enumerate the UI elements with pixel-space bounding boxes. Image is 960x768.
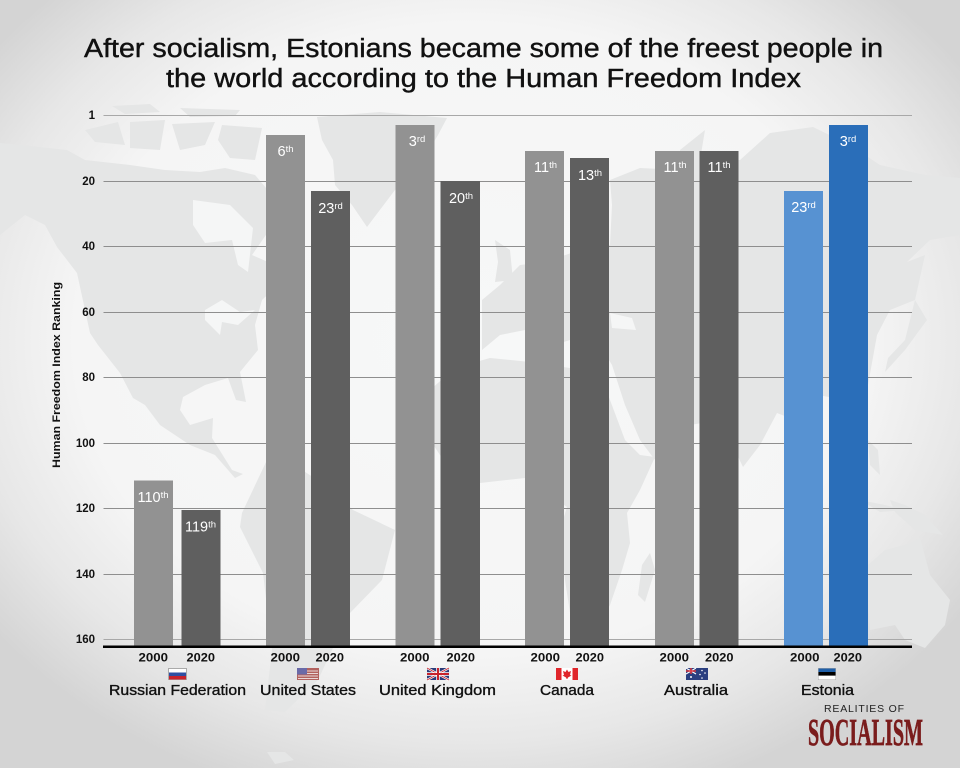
bars: United States	[266, 135, 350, 646]
bars: United Kingdom: 20	[449, 191, 465, 207]
year labels: 2020	[576, 652, 604, 664]
y axis labels: 100	[76, 438, 95, 450]
bars: Russian Federation: th	[208, 520, 216, 530]
australia	[868, 538, 950, 648]
flag: United States	[297, 668, 319, 680]
country labels: Canada	[540, 683, 595, 699]
y axis labels: 80	[82, 372, 95, 384]
x axis baseline	[103, 646, 912, 648]
year labels	[138, 652, 862, 664]
country labels	[109, 683, 855, 699]
bars: Estonia: rd	[807, 200, 816, 211]
bars: Canada	[525, 151, 609, 646]
logo: REALITIES OF	[824, 703, 904, 715]
flag: Estonia	[818, 668, 836, 680]
bars: Estonia: 3	[840, 134, 848, 150]
year labels: 2000	[530, 652, 560, 664]
bars	[134, 125, 868, 646]
y axis labels: 40	[82, 241, 95, 253]
africa	[430, 358, 655, 645]
year labels: 2000	[790, 652, 820, 664]
year labels: 2020	[316, 652, 344, 664]
y axis labels: 60	[82, 307, 95, 319]
bars: Australia: th	[723, 160, 730, 171]
country labels: Australia	[664, 683, 729, 699]
bars: Estonia: 23	[791, 200, 807, 216]
logo	[808, 703, 923, 754]
indonesia	[860, 440, 905, 512]
bars: Russian Federation: 110	[137, 490, 161, 506]
north america	[0, 143, 290, 478]
bars: Russian Federation	[134, 480, 220, 646]
bars: United Kingdom: 3	[409, 134, 417, 150]
bars: Australia	[655, 151, 738, 646]
title	[84, 35, 883, 93]
bars: Estonia	[784, 125, 868, 646]
bars: Russian Federation: 119	[185, 520, 208, 536]
y axis title: Human Freedom Index Ranking	[51, 282, 63, 468]
y axis labels: 1	[89, 110, 96, 122]
new guinea	[890, 500, 943, 535]
title: the world according to the Human Freedom Index	[166, 65, 801, 93]
year labels: 2020	[186, 652, 215, 664]
bars: United States: 6	[277, 144, 286, 160]
country labels: Estonia	[801, 683, 855, 699]
flag: Australia	[686, 668, 708, 680]
arctic islands	[85, 104, 262, 160]
bars: United States: th	[286, 144, 294, 155]
country labels: United States	[260, 683, 356, 699]
y axis labels	[76, 110, 96, 646]
south america	[240, 460, 395, 712]
year labels: 2020	[705, 652, 734, 664]
year labels: 2000	[270, 652, 300, 664]
year labels: 2020	[446, 652, 475, 664]
year labels: 2000	[660, 652, 689, 664]
great britain	[495, 240, 513, 282]
bars: Australia: 11	[708, 160, 723, 176]
flag: United Kingdom	[427, 668, 449, 680]
greenland	[317, 112, 447, 227]
year labels: 2000	[138, 652, 168, 664]
bars: Russian Federation: th	[161, 490, 169, 501]
bars: United States: rd	[334, 201, 343, 212]
country labels: United Kingdom	[379, 683, 496, 699]
y axis labels: 140	[76, 569, 95, 581]
japan	[885, 300, 927, 372]
title: After socialism, Estonians became some of the freest people in	[84, 35, 883, 63]
bars: Australia: 11	[664, 160, 679, 176]
bars: United Kingdom: th	[465, 191, 473, 202]
bars: Australia: th	[679, 160, 686, 171]
y axis labels: 120	[76, 503, 95, 515]
year labels: 2000	[400, 652, 430, 664]
eurasia	[482, 127, 960, 467]
bars: Canada: th	[549, 160, 557, 171]
y axis labels: 20	[82, 176, 95, 188]
flag: Russia	[168, 668, 187, 680]
year labels: 2020	[834, 652, 862, 664]
bars: Canada: th	[594, 168, 602, 179]
bars: Canada: 13	[578, 168, 594, 184]
bars: Canada: 11	[534, 160, 549, 176]
gridlines	[104, 116, 912, 640]
y axis labels: 160	[76, 634, 95, 646]
country labels: Russian Federation	[109, 683, 246, 699]
madagascar	[638, 553, 655, 602]
bars: United Kingdom	[396, 125, 480, 646]
bars: United Kingdom: rd	[417, 134, 425, 145]
bars: United States: 23	[318, 201, 334, 217]
flag: Canada	[556, 668, 578, 680]
bars: Estonia: rd	[848, 134, 856, 145]
